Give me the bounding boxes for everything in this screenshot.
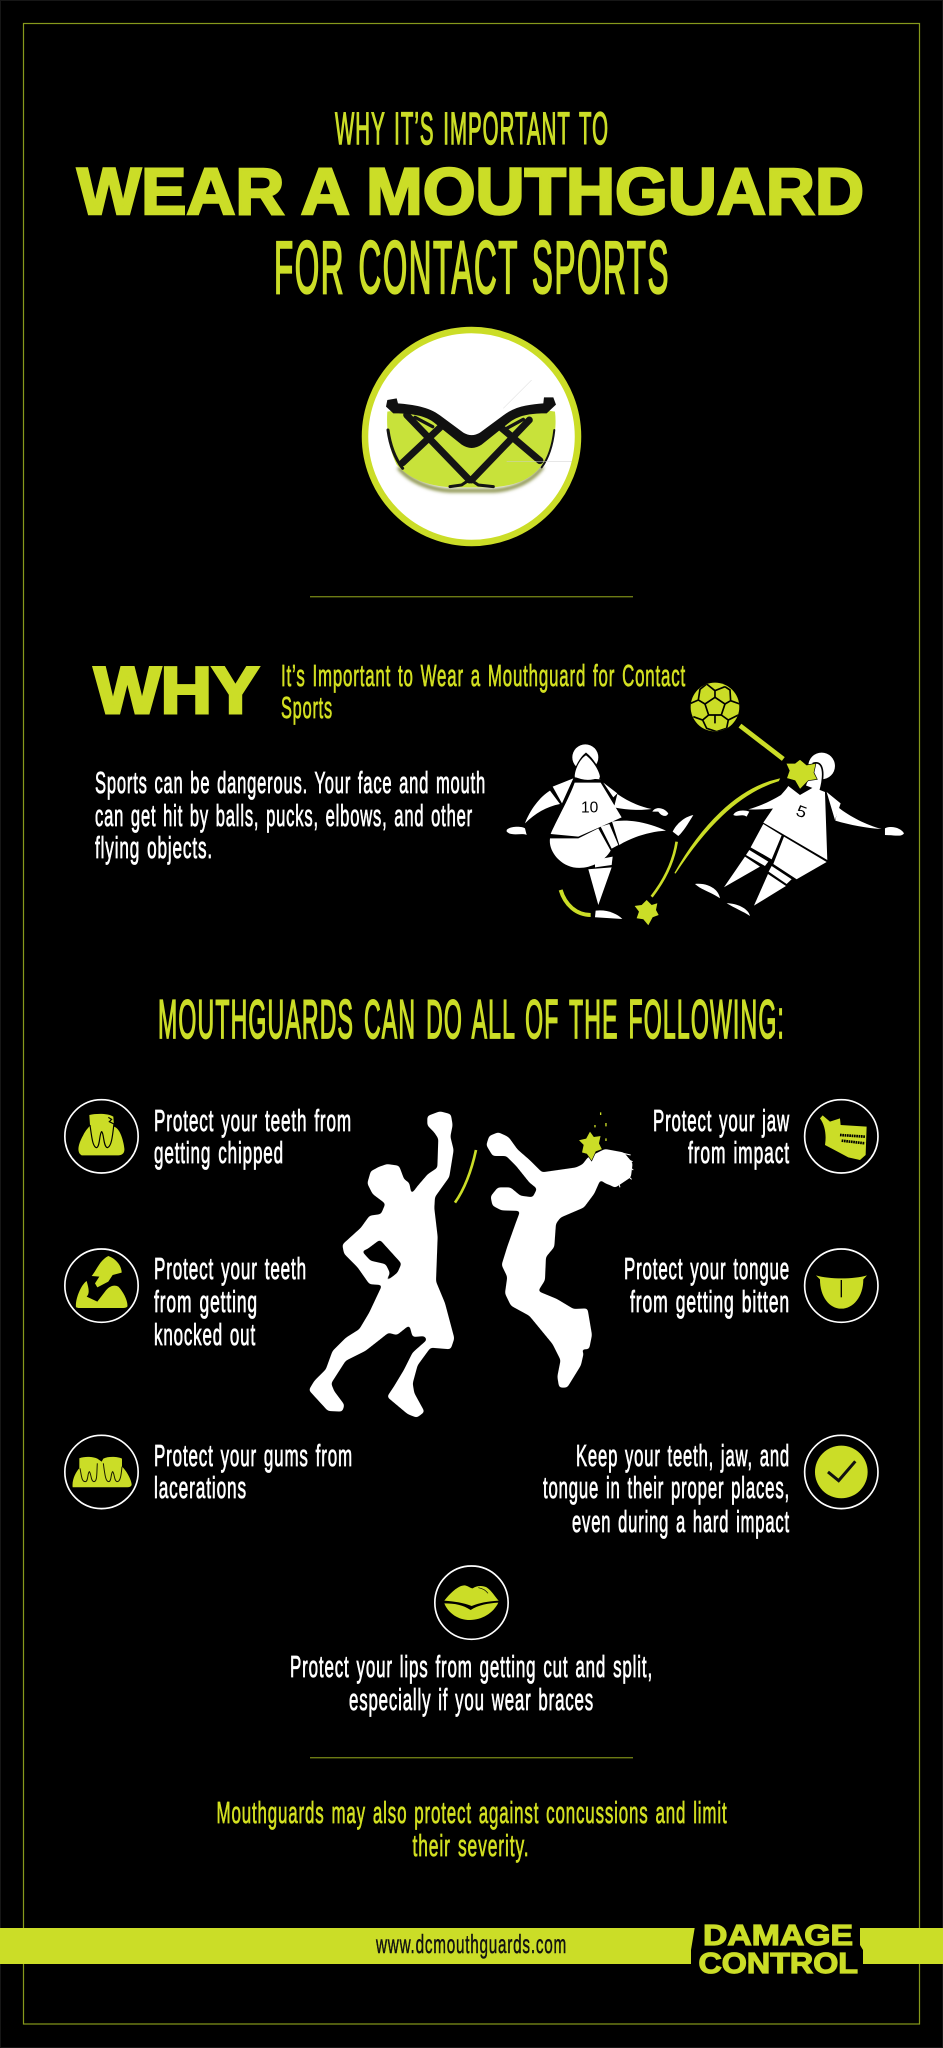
illustration: soccer players colliding: 5 bbox=[794, 803, 809, 822]
item: lips: Protect your lips from getting cut and split, bbox=[290, 1649, 653, 1684]
icon: chipped tooth bbox=[65, 1100, 138, 1173]
mouthguard photo in circle bbox=[365, 330, 578, 543]
title: WEAR A MOUTHGUARD bbox=[77, 154, 864, 228]
item: lips bbox=[290, 1566, 653, 1717]
item: teeth knocked out bbox=[65, 1249, 307, 1352]
impact star bbox=[578, 1131, 602, 1161]
closing note bbox=[216, 1795, 728, 1863]
item: tongue bbox=[624, 1249, 878, 1322]
icon: knocked-out tooth bbox=[65, 1249, 138, 1322]
divider bbox=[310, 1757, 633, 1758]
icon: tongue bbox=[805, 1249, 878, 1322]
boxer punching bbox=[310, 1112, 453, 1417]
body text: sports can be dangerous: Sports can be dangerous. Your face and mouth bbox=[95, 765, 486, 800]
why heading: Sports bbox=[281, 690, 333, 725]
item: teeth knocked out: Protect your teeth bbox=[154, 1251, 307, 1286]
item: gums bbox=[65, 1435, 353, 1509]
icon: gums with two teeth bbox=[65, 1435, 138, 1509]
item: teeth chipped: getting chipped bbox=[154, 1135, 284, 1170]
item: proper places bbox=[543, 1435, 878, 1539]
why heading bbox=[94, 653, 686, 727]
icon: jaw bbox=[805, 1100, 878, 1173]
item: lips: especially if you wear braces bbox=[349, 1682, 594, 1717]
body text: sports can be dangerous: can get hit by balls, pucks, elbows, and other bbox=[95, 798, 473, 833]
closing note: their severity. bbox=[412, 1828, 530, 1863]
logo: Damage Control: CONTROL bbox=[698, 1948, 858, 1980]
item: tongue: Protect your tongue bbox=[624, 1251, 790, 1286]
item: teeth knocked out: from getting bbox=[154, 1284, 258, 1319]
ball and impact bbox=[561, 683, 817, 925]
item: teeth chipped bbox=[65, 1100, 352, 1173]
item: jaw: from impact bbox=[688, 1135, 790, 1170]
item: jaw: Protect your jaw bbox=[653, 1103, 790, 1138]
icon: lips bbox=[435, 1566, 508, 1639]
title bbox=[77, 103, 864, 309]
icon: check bbox=[805, 1435, 878, 1509]
boxer hit bbox=[487, 1133, 632, 1387]
item: gums: lacerations bbox=[154, 1470, 247, 1505]
illustration: soccer players colliding: 10 bbox=[581, 799, 598, 816]
player 5 bbox=[695, 753, 904, 916]
body text: sports can be dangerous bbox=[95, 765, 486, 865]
body text: sports can be dangerous: flying objects. bbox=[95, 830, 213, 865]
footer bar bbox=[0, 1920, 943, 1980]
illustration: soccer players colliding bbox=[507, 683, 904, 925]
illustration: boxers bbox=[310, 1112, 633, 1417]
item: tongue: from getting bitten bbox=[630, 1284, 790, 1319]
item: jaw bbox=[653, 1100, 878, 1173]
footer bar: www.dcmouthguards.com bbox=[375, 1929, 567, 1959]
logo: Damage Control: DAMAGE bbox=[703, 1920, 853, 1952]
item: teeth chipped: Protect your teeth from bbox=[154, 1103, 352, 1138]
divider bbox=[310, 596, 633, 597]
title: WHY IT’S IMPORTANT TO bbox=[335, 103, 609, 154]
player 10 bbox=[507, 744, 693, 919]
logo: Damage Control bbox=[691, 1920, 863, 1980]
item: gums: Protect your gums from bbox=[154, 1438, 353, 1473]
why heading: WHY bbox=[94, 653, 259, 727]
item: teeth knocked out: knocked out bbox=[154, 1317, 256, 1352]
